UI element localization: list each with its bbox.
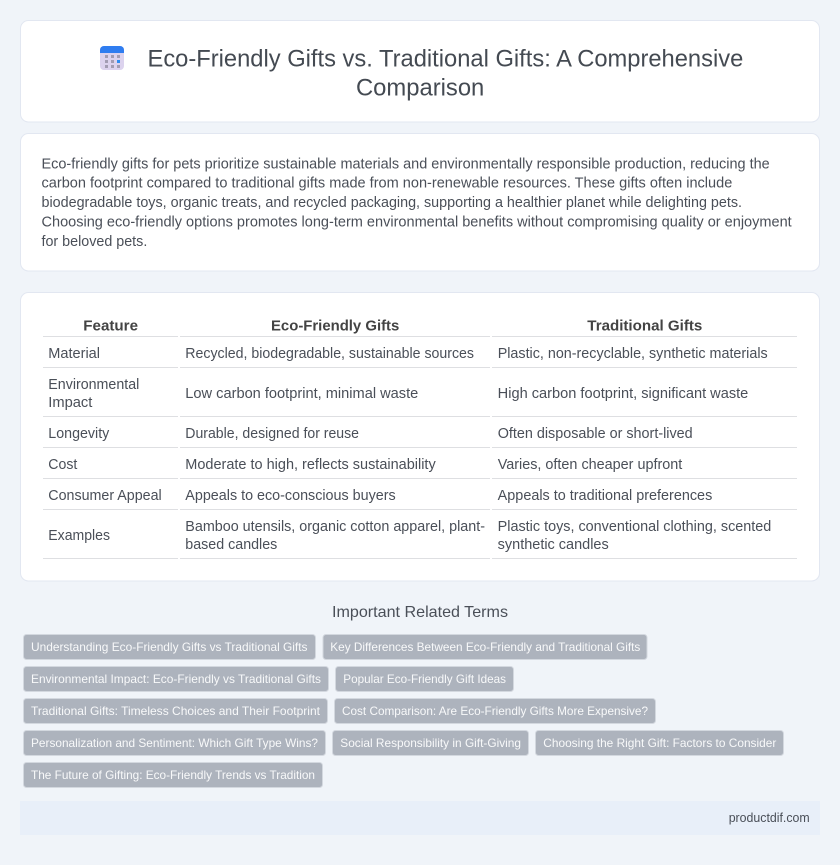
tag (24, 698, 328, 724)
row: material (48, 346, 768, 362)
row: environmental impact: Low carbon footprint, minimal waste (185, 386, 418, 402)
intro paragraph: for beloved pets. (42, 234, 147, 250)
tag: Key Differences Between Eco-Friendly and Traditional Gifts (330, 640, 640, 654)
tag (336, 666, 514, 692)
tag (334, 698, 656, 724)
tag: Environmental Impact: Eco-Friendly vs Traditional Gifts (31, 672, 321, 686)
row: environmental impact: Impact (48, 395, 92, 411)
row: consumer appeal: Appeals to eco-conscious buyers (185, 488, 396, 504)
tag: Understanding Eco-Friendly Gifts vs Traditional Gifts (31, 640, 308, 654)
panel: title header (20, 20, 820, 122)
tag (24, 730, 326, 756)
row: environmental impact (48, 377, 748, 411)
heading: important related terms: Important Related Terms (332, 604, 508, 621)
title: Eco-Friendly Gifts vs. Traditional Gifts: A Comprehensive (148, 46, 743, 73)
row: material: Recycled, biodegradable, sustainable sources (185, 346, 474, 362)
intro paragraph: biodegradable toys, organic treats, and recycled packaging, supporting a healthier planet while delighting pets. (42, 195, 742, 211)
intro paragraph (42, 156, 792, 250)
tag (24, 762, 322, 788)
row: consumer appeal: Consumer Appeal (48, 488, 162, 504)
intro paragraph: carbon footprint compared to traditional gifts made from non-renewable resources. These gifts often include (42, 176, 732, 192)
panel: introduction (20, 134, 820, 271)
tag (536, 730, 784, 756)
row: material: Plastic, non-recyclable, synthetic materials (498, 346, 768, 362)
title: Comparison (356, 75, 484, 102)
tag: Cost Comparison: Are Eco-Friendly Gifts More Expensive? (342, 704, 648, 718)
row: consumer appeal (48, 488, 712, 504)
tag (24, 666, 328, 692)
tag: The Future of Gifting: Eco-Friendly Trends vs Tradition (31, 768, 315, 782)
tag: Popular Eco-Friendly Gift Ideas (343, 672, 506, 686)
footer source text: productdif.com (729, 810, 810, 825)
panel: comparison table (20, 292, 820, 581)
tag: Choosing the Right Gift: Factors to Consider (543, 736, 776, 750)
row: longevity: Durable, designed for reuse (185, 426, 359, 442)
table header row (83, 318, 702, 334)
table header row: Traditional Gifts (587, 318, 702, 334)
tag (24, 634, 316, 660)
row: material: Material (48, 346, 100, 362)
row: examples: synthetic candles (498, 537, 609, 553)
panel: related term tags (24, 634, 784, 788)
intro paragraph: Eco-friendly gifts for pets prioritize sustainable materials and environmentally responsible production, reducing the (42, 156, 770, 172)
tag: Social Responsibility in Gift-Giving (340, 736, 521, 750)
row: examples: Plastic toys, conventional clothing, scented (498, 519, 771, 535)
row: examples (48, 519, 771, 553)
row: examples: based candles (185, 537, 277, 553)
row: environmental impact: Environmental (48, 377, 139, 393)
intro paragraph: Choosing eco-friendly options promotes long-term environmental benefits without compromising quality or enjoyment (42, 215, 792, 231)
row: cost: Cost (48, 457, 77, 473)
row: longevity: Longevity (48, 426, 110, 442)
row: longevity (48, 426, 693, 442)
tag: Personalization and Sentiment: Which Gift Type Wins? (31, 736, 318, 750)
tag: Traditional Gifts: Timeless Choices and Their Footprint (31, 704, 321, 718)
row: examples: Examples (48, 528, 110, 544)
row: cost (48, 457, 682, 473)
row: examples: Bamboo utensils, organic cotton apparel, plant- (185, 519, 485, 535)
row: longevity: Often disposable or short-lived (498, 426, 693, 442)
icon: calendar (100, 46, 124, 70)
tag (332, 730, 528, 756)
tag (323, 634, 647, 660)
row: environmental impact: High carbon footprint, significant waste (498, 386, 748, 402)
title (148, 46, 743, 102)
table header row: Eco-Friendly Gifts (271, 318, 399, 334)
footer (20, 801, 820, 835)
row: cost: Moderate to high, reflects sustainability (185, 457, 437, 473)
table header row: Feature (83, 318, 138, 334)
row: cost: Varies, often cheaper upfront (498, 457, 682, 473)
row: consumer appeal: Appeals to traditional preferences (498, 488, 712, 504)
